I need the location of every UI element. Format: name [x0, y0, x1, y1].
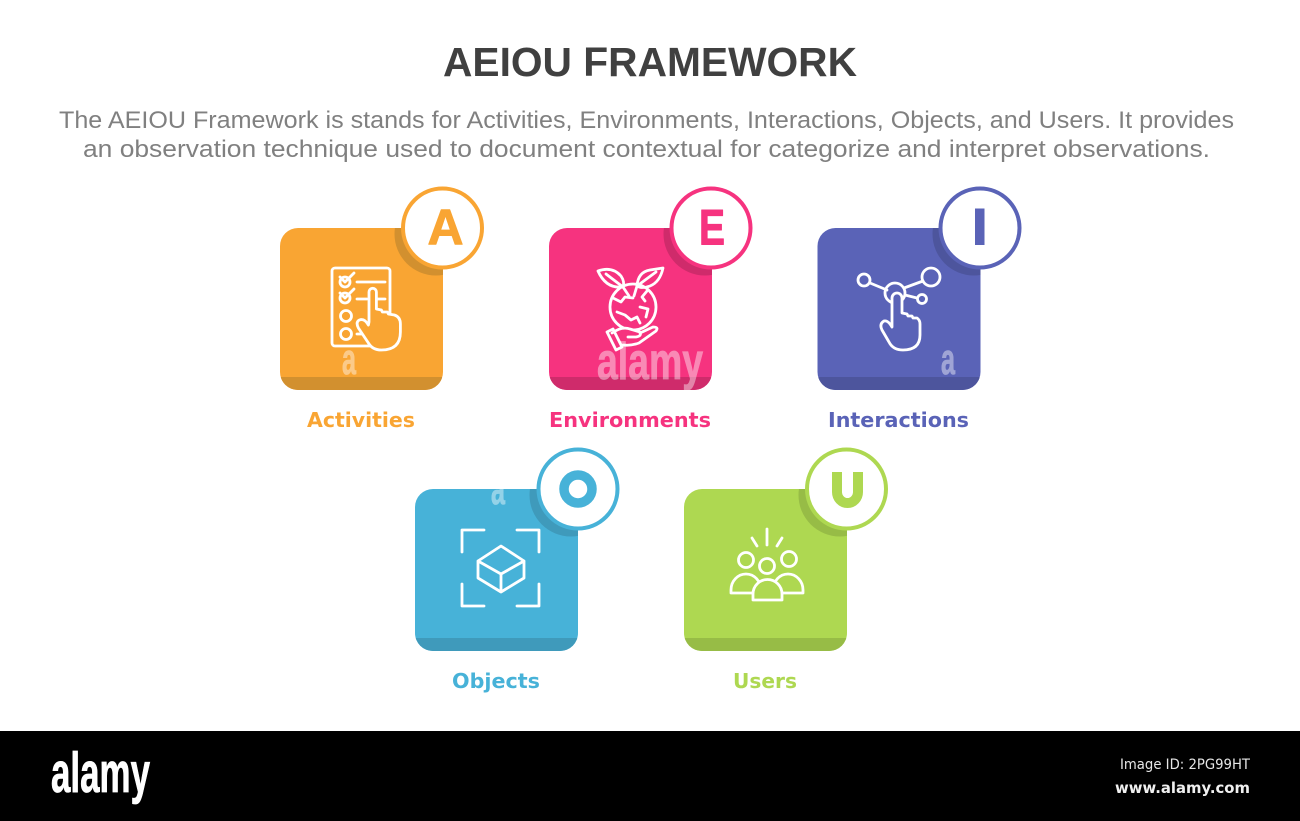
badge E — [672, 188, 750, 268]
icon: checklist with pointing hand — [332, 268, 400, 350]
watermark: alamy over Environments card: alamy — [597, 333, 703, 391]
label Activities: Activities — [307, 408, 415, 432]
footer image id: Image ID: 2PG99HT — [1120, 757, 1250, 773]
subtitle text block — [59, 107, 1234, 163]
label Interactions: Interactions — [828, 408, 969, 432]
badge I — [940, 188, 1020, 268]
icon: globe with leaves on hand — [598, 268, 663, 350]
badge A — [403, 188, 482, 268]
footer website: www.alamy.com — [1115, 779, 1250, 797]
icon: cube in focus frame — [462, 530, 539, 606]
badge E: E — [699, 200, 725, 256]
label Objects: Objects — [452, 669, 540, 693]
card tile — [415, 489, 578, 651]
badge O — [538, 450, 618, 528]
card tile — [684, 489, 847, 651]
panel: Interactions — [818, 188, 1020, 432]
label Environments: Environments — [549, 408, 711, 432]
panel: Users — [684, 450, 886, 693]
card tile — [280, 228, 443, 390]
label Users: Users — [733, 669, 797, 693]
card tile — [549, 228, 712, 390]
footer bar — [0, 731, 1300, 821]
panel: Environments — [549, 188, 750, 432]
panel: Activities — [280, 188, 482, 432]
watermark: small a on Activities: a — [342, 335, 356, 384]
subtitle text block: an observation technique used to document contextual for categorize and interpret observations. — [83, 136, 1210, 163]
icon: network nodes with pointing hand — [858, 268, 940, 350]
icon: group of users — [731, 529, 803, 600]
card tile — [818, 228, 980, 390]
title: AEIOU FRAMEWORK — [443, 39, 857, 85]
footer logo alamy: alamy — [51, 741, 150, 805]
panel: Objects — [415, 450, 618, 693]
watermark: small a on Interactions: a — [941, 335, 955, 384]
badge A: A — [428, 200, 464, 256]
watermark: small a on Objects: a — [491, 465, 505, 514]
subtitle text block: The AEIOU Framework is stands for Activities, Environments, Interactions, Objects, and Users. It provides — [59, 107, 1234, 134]
badge U — [807, 450, 886, 528]
